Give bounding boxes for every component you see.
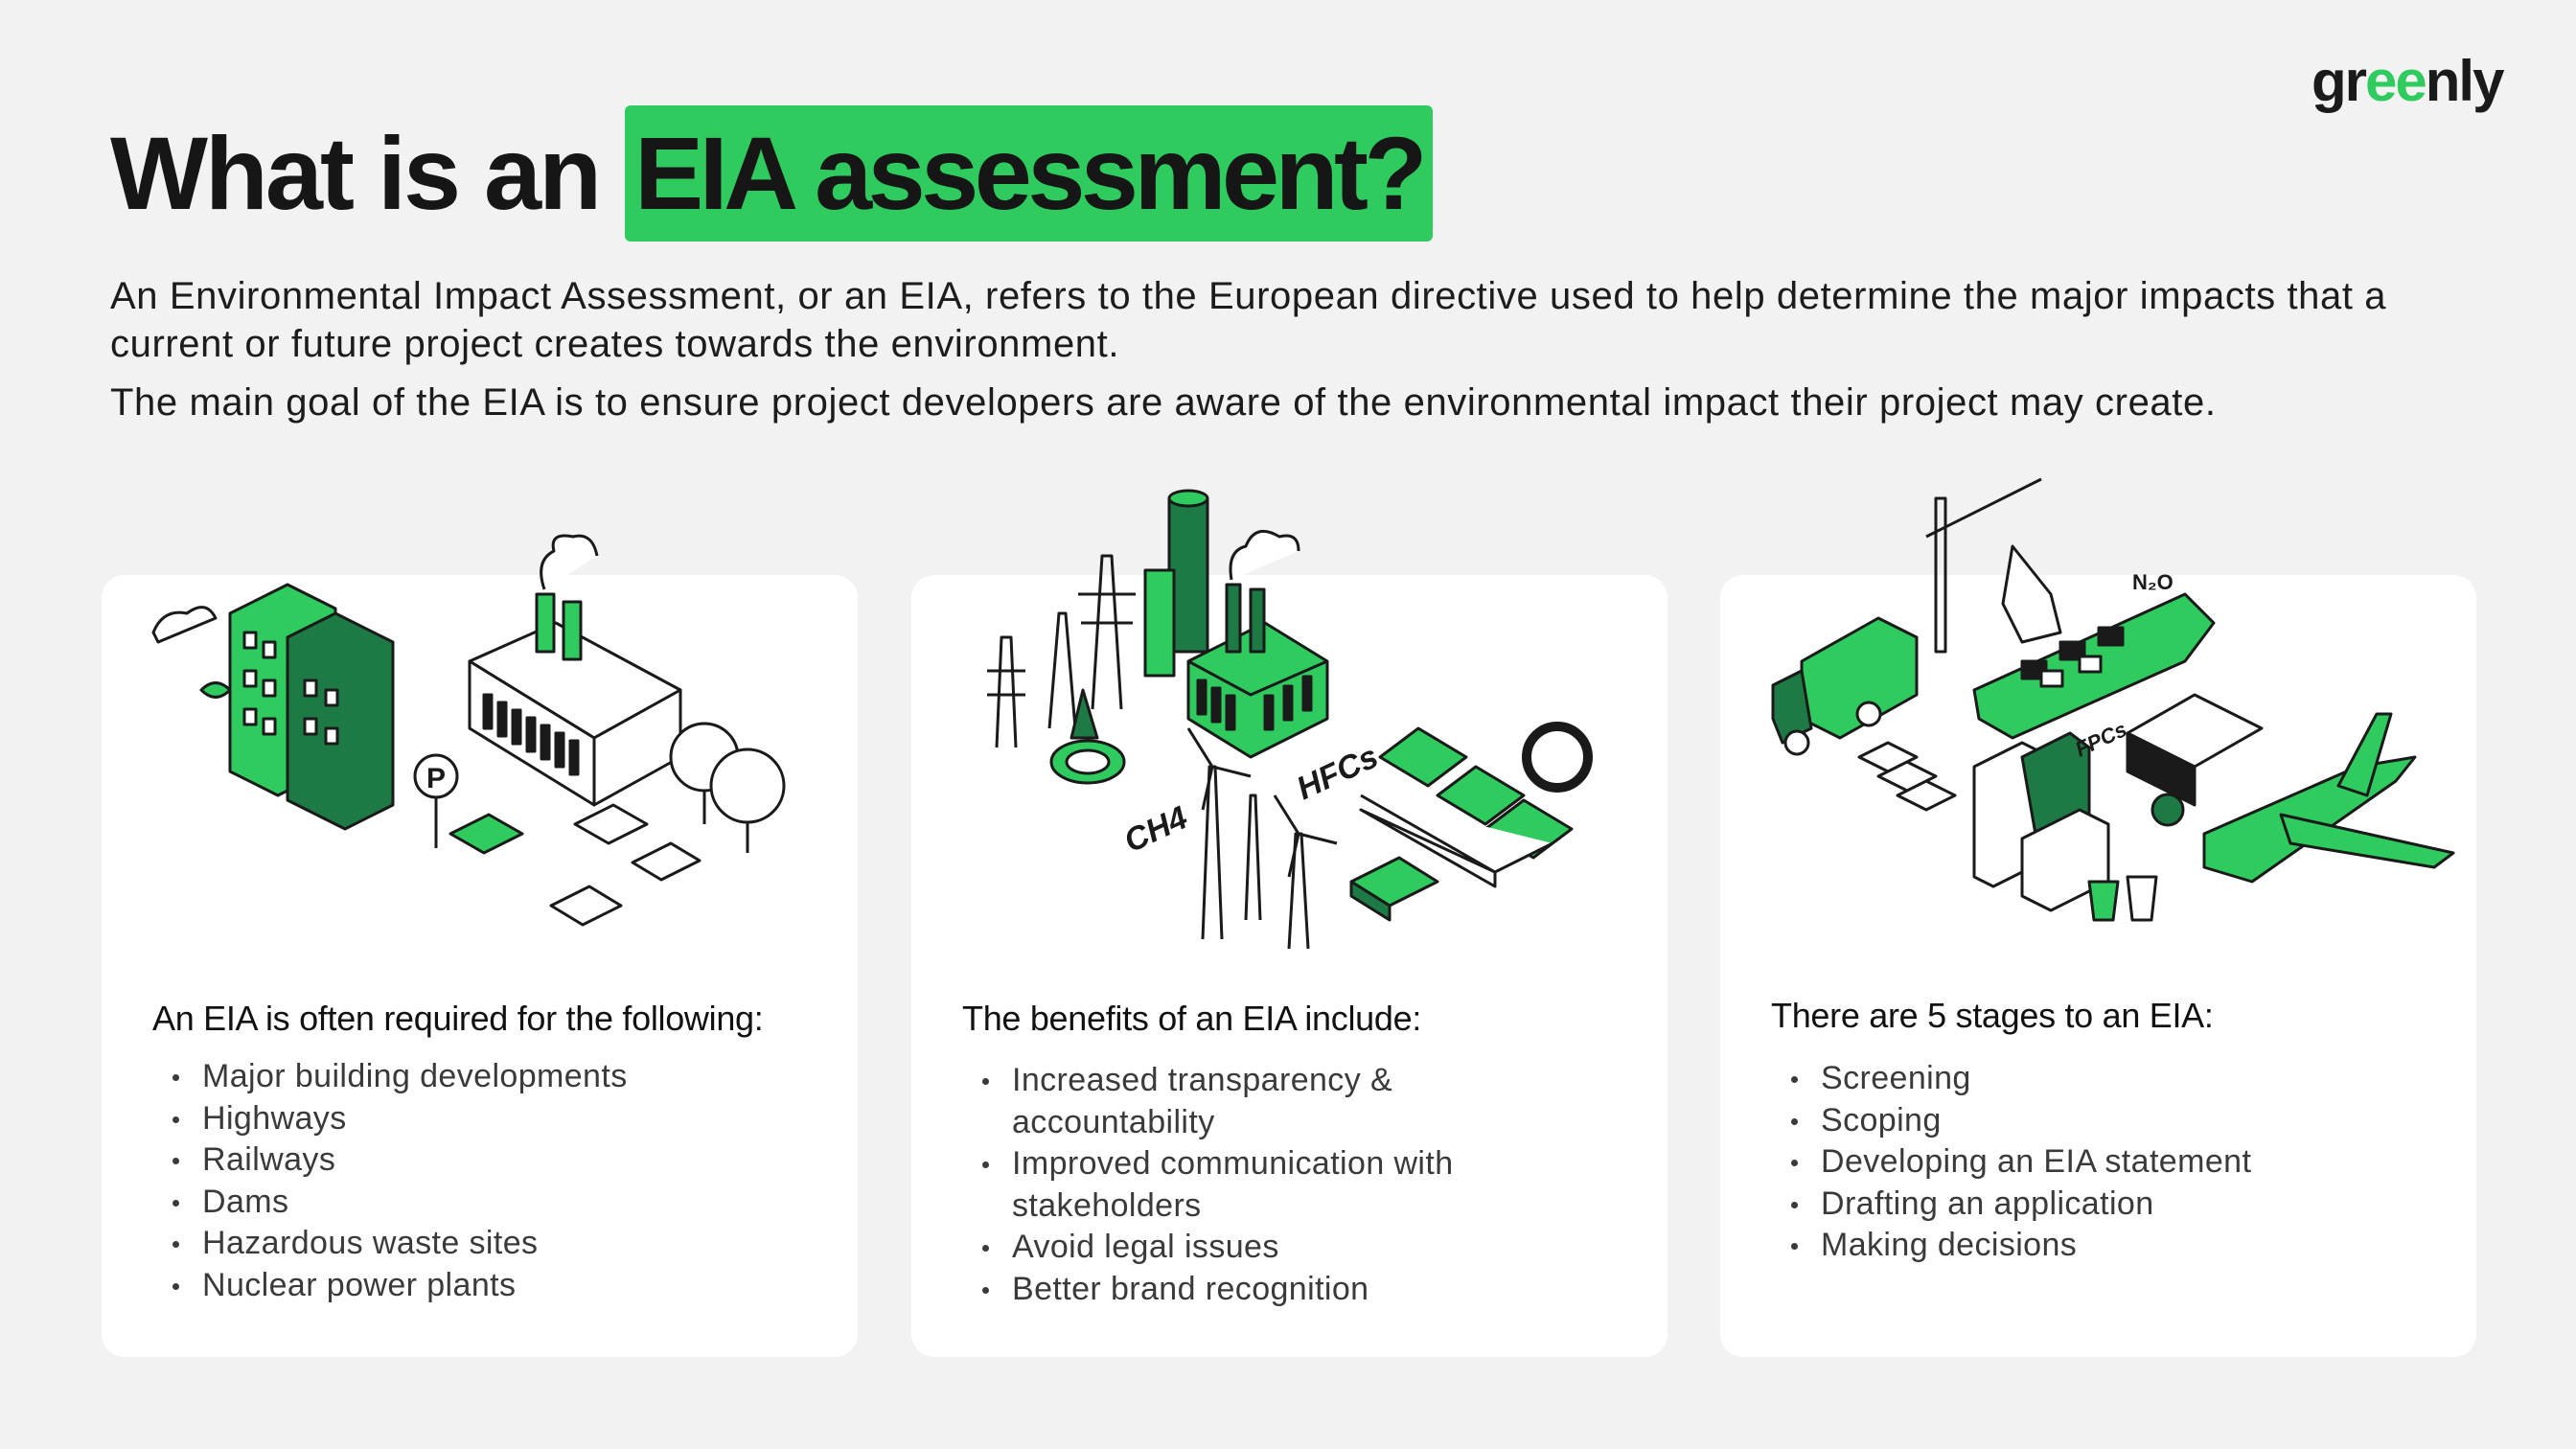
- list: required: Nuclear power plants: [202, 1267, 516, 1303]
- intro paragraph: An Environmental Impact Assessment, or an EIA, refers to the European directive used to help determine the major impacts that a: [110, 275, 2386, 317]
- list: stages: Screening: [1821, 1060, 1971, 1096]
- list: required: Railways: [202, 1141, 335, 1178]
- list: stages: Scoping: [1821, 1102, 1942, 1138]
- list: benefits: accountability: [1012, 1104, 1215, 1140]
- list: benefits: [982, 1062, 1454, 1307]
- heading: benefits: The benefits of an EIA include:: [962, 999, 1421, 1038]
- list: benefits: Avoid legal issues: [1012, 1229, 1279, 1265]
- list: benefits: Better brand recognition: [1012, 1271, 1368, 1307]
- illustration: energy: [987, 491, 1588, 949]
- list: benefits: Improved communication with: [1012, 1145, 1454, 1182]
- list: stages: Making decisions: [1821, 1227, 2077, 1263]
- logo: greenly: [2312, 49, 2502, 113]
- list: required: [172, 1058, 628, 1303]
- heading: required: An EIA is often required for the following:: [152, 999, 763, 1038]
- intro paragraph: [110, 275, 2386, 424]
- title: [110, 105, 1433, 242]
- list: required: Major building developments: [202, 1058, 628, 1094]
- illustration: transport: N₂O: [2132, 570, 2174, 594]
- illustration: energy: CH4: [1118, 799, 1193, 860]
- intro paragraph: current or future project creates towards the environment. The main goal of the EIA is to ensure project developers are aware of the environmental impact their project may create.: [110, 323, 2217, 424]
- panel: benefits: [911, 575, 1668, 1357]
- illustration: city and factory: [153, 536, 784, 925]
- illustration: transport: FPCs: [2072, 717, 2130, 762]
- panel: stages: [1720, 575, 2476, 1357]
- title: EIA assessment?: [634, 115, 1423, 231]
- illustration: city and factory: P: [426, 763, 446, 794]
- list: required: Highways: [202, 1100, 347, 1137]
- list: benefits: Increased transparency &: [1012, 1062, 1392, 1098]
- heading: stages: There are 5 stages to an EIA:: [1771, 996, 2214, 1035]
- illustration: energy: HFCs: [1291, 738, 1384, 807]
- list: stages: Developing an EIA statement: [1821, 1143, 2251, 1180]
- list: stages: Drafting an application: [1821, 1184, 2154, 1221]
- list: benefits: stakeholders: [1012, 1186, 1202, 1223]
- list: required: Hazardous waste sites: [202, 1225, 538, 1261]
- illustration: transport: [1773, 479, 2453, 920]
- title: What is an: [110, 115, 599, 231]
- panel: required for: [102, 575, 858, 1357]
- list: stages: [1791, 1060, 2251, 1263]
- list: required: Dams: [202, 1183, 288, 1219]
